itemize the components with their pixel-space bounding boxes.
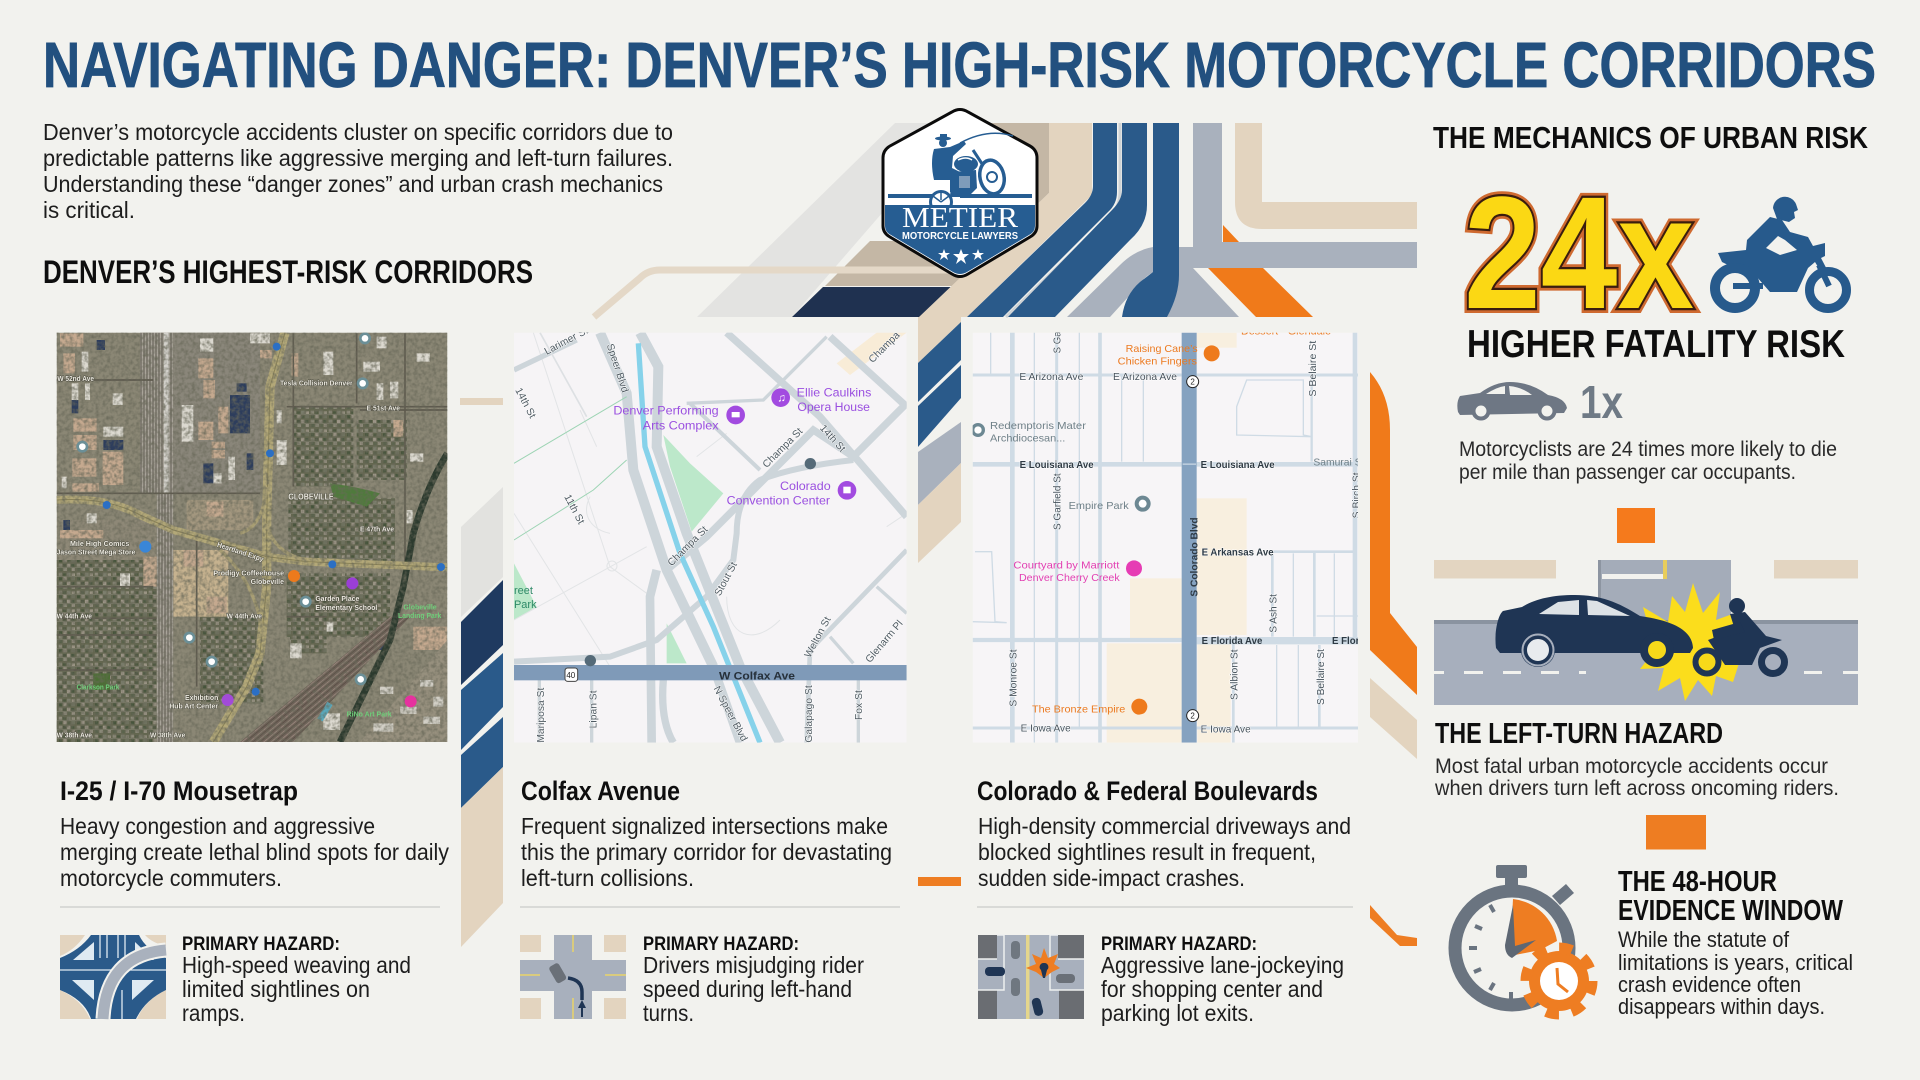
corridor description: High-density commercial driveways and xyxy=(978,813,1351,839)
map: Colorado Boulevard: S Ga xyxy=(1053,331,1064,353)
hazard text xyxy=(182,934,411,1026)
intro text xyxy=(43,119,673,223)
map: Colorado Boulevard: E Arizona Ave xyxy=(1113,372,1177,383)
corridor description: Heavy congestion and aggressive xyxy=(60,813,375,839)
map: Colfax Avenue: Lipan St xyxy=(589,690,600,728)
logo: Metier hexagon badge: METIER xyxy=(902,202,1019,234)
text: left-turn hazard: Most fatal urban motorcycle accidents occur xyxy=(1435,755,1828,778)
map: Colfax Avenue: 14th St xyxy=(512,386,537,420)
map: I-25 / I-70 satellite: Clarkson Park xyxy=(77,682,120,691)
text: evidence window: disappears within days. xyxy=(1618,994,1825,1019)
map: Colorado Boulevard: S Birch St xyxy=(1351,472,1362,518)
map: Colorado Boulevard: Samurai S xyxy=(1313,458,1362,469)
map: Colorado Boulevard: Redemptoris Mater xyxy=(990,421,1087,432)
hazard text xyxy=(1101,934,1344,1026)
text: evidence window xyxy=(1618,927,1853,1019)
corridor name: Colorado & Federal Boulevards xyxy=(977,776,1318,806)
map: Colorado Boulevard: Empire Park xyxy=(1069,501,1130,512)
map: Colfax Avenue: Colorado xyxy=(780,480,831,493)
panel: I-25 / I-70 Mousetrap text xyxy=(60,776,449,1026)
map: Colfax Avenue: 14th St xyxy=(817,423,847,455)
icon: busy intersection xyxy=(978,935,1084,1019)
map: I-25 / I-70 satellite: Jason Street Mega Store xyxy=(57,548,135,557)
map: Colorado Boulevard: Dessert · Glendale xyxy=(1241,327,1331,338)
map: Colorado Boulevard: S Garfield St xyxy=(1053,473,1064,530)
hazard text: Aggressive lane-jockeying xyxy=(1101,952,1344,978)
map: Colfax Avenue: Fox St xyxy=(854,690,865,720)
map: Colfax Avenue: Galapago St xyxy=(804,685,815,743)
map: I-25 / I-70 satellite: Tesla Collision Denver xyxy=(280,379,353,388)
text: left-turn hazard xyxy=(1434,755,1839,800)
icon: left-turn intersection xyxy=(520,935,626,1019)
intro text: Understanding these “danger zones” and urban crash mechanics xyxy=(43,171,663,197)
corridor description: motorcycle commuters. xyxy=(60,865,282,891)
road graphic: left channel xyxy=(460,398,503,947)
map: I-25 / I-70 satellite: Landing Park xyxy=(398,611,442,620)
map: Colfax Avenue: Stout St xyxy=(713,560,740,598)
map: Colfax Avenue: Ellie Caulkins xyxy=(797,387,872,400)
corridor description xyxy=(60,813,449,891)
map: Colfax Avenue: reet xyxy=(514,585,533,597)
map: Colfax Avenue: Champa St xyxy=(666,524,710,569)
map: Colorado Boulevard: E Arizona Ave xyxy=(1019,372,1083,383)
hazard text: PRIMARY HAZARD: xyxy=(182,934,340,955)
icon: car xyxy=(1457,382,1567,418)
logo: Metier hexagon badge xyxy=(883,110,1037,276)
heading: evidence window xyxy=(1618,866,1843,927)
map: Colorado Boulevard: E Louisiana Ave xyxy=(1201,460,1275,471)
map: I-25 / I-70 satellite: Globeville xyxy=(403,602,437,611)
corridor description: blocked sightlines result in frequent, xyxy=(978,839,1316,865)
intro text: is critical. xyxy=(43,197,135,223)
map: Colorado Boulevard: E Iowa Ave xyxy=(1201,724,1251,735)
map: Colorado Boulevard: S Belaire St xyxy=(1308,340,1319,397)
intro text: predictable patterns like aggressive merging and left-turn failures. xyxy=(43,145,673,171)
map: Colorado Boulevard: S Albion St xyxy=(1229,649,1240,700)
road graphic: centre channel xyxy=(918,317,961,886)
map: Colorado Boulevard: 2 xyxy=(1190,712,1195,721)
text: evidence window: limitations is years, critical xyxy=(1618,950,1853,975)
map: Colfax Avenue: Larimer St xyxy=(543,326,590,358)
hazard text: turns. xyxy=(643,1000,694,1026)
corridor description xyxy=(978,813,1351,891)
map: Colfax Avenue: Mariposa St xyxy=(536,687,547,743)
stat description: Motorcyclists are 24 times more likely to die xyxy=(1459,438,1837,461)
map: I-25 / I-70 satellite: Exhibition xyxy=(185,693,219,702)
stat description: per mile than passenger car occupants. xyxy=(1459,461,1796,484)
accent: orange block xyxy=(1646,815,1706,850)
map: I-25 / I-70 satellite: GLOBEVILLE xyxy=(288,492,334,501)
stat description xyxy=(1459,438,1837,484)
corridor description xyxy=(521,813,892,891)
map: Colorado Boulevard: Chicken Fingers xyxy=(1118,357,1197,368)
map: Colfax Avenue: W Colfax Ave xyxy=(719,671,795,683)
corridor description: sudden side-impact crashes. xyxy=(978,865,1245,891)
hazard text: Drivers misjudging rider xyxy=(643,952,864,978)
accent: orange square xyxy=(1617,508,1655,543)
illustration: left-turn crash xyxy=(1434,560,1858,705)
panel: Colfax Avenue text xyxy=(520,776,900,1026)
map: I-25 / I-70 satellite: W 38th Ave xyxy=(150,730,185,739)
logo: Metier hexagon badge: MOTORCYCLE LAWYERS xyxy=(902,230,1018,242)
heading: evidence window: THE 48-HOUR xyxy=(1618,866,1777,898)
map: Colorado Boulevard: Denver Cherry Creek xyxy=(1019,573,1121,584)
corridor description: merging create lethal blind spots for daily xyxy=(60,839,449,865)
icon: motorcycle rider xyxy=(1715,197,1846,308)
map: I-25 / I-70 satellite: W 44th Ave xyxy=(227,612,262,621)
map: Colfax Avenue: Champa xyxy=(867,330,903,365)
map: Colorado Boulevard: S Ash St xyxy=(1269,594,1280,633)
map: Colfax Avenue: N Speer Blvd xyxy=(711,685,749,744)
map: Colfax Avenue: Glenarm Pl xyxy=(864,619,905,665)
text: left-turn hazard: when drivers turn left across oncoming riders. xyxy=(1434,777,1839,800)
hazard text: limited sightlines on xyxy=(182,976,370,1002)
icon: freeway interchange xyxy=(60,935,166,1019)
corridor description: this the primary corridor for devastating xyxy=(521,839,892,865)
stat: 24x: 24x xyxy=(1464,163,1694,342)
hazard text: for shopping center and xyxy=(1101,976,1323,1002)
corridor name: Colfax Avenue xyxy=(521,776,680,806)
map: Colfax Avenue: ♫ xyxy=(777,393,786,405)
map: Colfax Avenue: Welton St xyxy=(803,615,834,660)
map: I-25 / I-70 satellite: Globeville xyxy=(251,577,284,586)
map: I-25 / I-70 satellite: Prodigy Coffeehouse xyxy=(213,569,284,578)
map: I-25 / I-70 satellite: E 47th Ave xyxy=(360,525,394,534)
text: evidence window: While the statute of xyxy=(1618,927,1790,952)
hazard text: PRIMARY HAZARD: xyxy=(643,934,799,955)
panel: Colorado & Federal text xyxy=(977,776,1353,1026)
map: Colfax Avenue: Convention Center xyxy=(727,495,830,508)
map: Colfax Avenue xyxy=(512,326,907,744)
map: Colorado Boulevard: E Florida Ave xyxy=(1202,636,1263,647)
hazard text: ramps. xyxy=(182,1000,245,1026)
map: I-25 / I-70 satellite: W 38th Ave xyxy=(57,730,92,739)
map: Colorado Boulevard xyxy=(973,327,1362,743)
map: Colfax Avenue: Opera House xyxy=(797,401,870,414)
map: I-25 / I-70 satellite: Elementary School xyxy=(315,603,377,612)
map: Colorado Boulevard: Courtyard by Marriott xyxy=(1013,560,1119,571)
stat: 24x: 24x xyxy=(1464,163,1694,342)
map: Colorado Boulevard: 2 xyxy=(1190,378,1195,387)
corridor description: left-turn collisions. xyxy=(521,865,694,891)
map: Colorado Boulevard: E Arkansas Ave xyxy=(1202,547,1274,558)
map: Colfax Avenue: Park xyxy=(514,599,537,611)
corridor name: I-25 / I-70 Mousetrap xyxy=(60,776,298,806)
heading: evidence window: EVIDENCE WINDOW xyxy=(1618,895,1843,927)
map: Colfax Avenue: 11th St xyxy=(561,493,586,526)
hazard text: parking lot exits. xyxy=(1101,1000,1254,1026)
map: I-25 / I-70 satellite: Hub Art Center xyxy=(169,702,218,711)
map: Colorado Boulevard: S Colorado Blvd xyxy=(1189,517,1200,597)
intro text: Denver’s motorcycle accidents cluster on specific corridors due to xyxy=(43,119,673,145)
map: Colfax Avenue: 40 xyxy=(566,671,576,680)
map: Colorado Boulevard: E Flori xyxy=(1332,636,1362,647)
map: Colorado Boulevard: Archdiocesan... xyxy=(990,434,1065,445)
map: Colorado Boulevard: E Louisiana Ave xyxy=(1020,460,1094,471)
map: I-25 / I-70 satellite: E 51st Ave xyxy=(367,404,400,413)
comparison: 1x: 1x xyxy=(1580,376,1623,428)
text: evidence window: crash evidence often xyxy=(1618,972,1801,997)
hazard text: High-speed weaving and xyxy=(182,952,411,978)
map: I-25 / I-70 satellite: W 52nd Ave xyxy=(57,374,94,383)
map: Colorado Boulevard: E Iowa Ave xyxy=(1021,724,1071,735)
map: Colfax Avenue: Arts Complex xyxy=(643,419,719,432)
map: Colorado Boulevard: S Bellaire St xyxy=(1316,649,1327,705)
hazard text xyxy=(643,934,864,1026)
hazard text: speed during left-hand xyxy=(643,976,852,1002)
stat label: higher fatality risk: HIGHER FATALITY RISK xyxy=(1467,323,1845,366)
map: I-25 / I-70 satellite xyxy=(57,333,447,742)
map: Colorado Boulevard: The Bronze Empire xyxy=(1032,705,1126,716)
map: I-25 / I-70 satellite: Garden Place xyxy=(315,594,359,603)
heading: corridors: DENVER’S HIGHEST-RISK CORRIDORS xyxy=(43,254,533,290)
road graphic: right channel xyxy=(1370,372,1417,946)
map: Colorado Boulevard: Raising Cane’s xyxy=(1126,344,1198,355)
heading: left-turn hazard: THE LEFT-TURN HAZARD xyxy=(1435,718,1723,750)
corridor description: Frequent signalized intersections make xyxy=(521,813,888,839)
hazard text: PRIMARY HAZARD: xyxy=(1101,934,1257,955)
map: Colorado Boulevard: S Monroe St xyxy=(1009,649,1020,707)
map: Colfax Avenue: Champa St xyxy=(761,426,805,470)
road graphic: central interchange xyxy=(594,123,1417,317)
icon: stopwatch and gear xyxy=(1455,865,1592,1014)
map: I-25 / I-70 satellite: Mile High Comics xyxy=(70,539,129,548)
map: Colfax Avenue: Speer Blvd xyxy=(604,343,630,394)
map: Colfax Avenue: Denver Performing xyxy=(613,405,719,418)
map: I-25 / I-70 satellite: W 44th Ave xyxy=(57,611,92,620)
map: I-25 / I-70 satellite: RiNo Art Park xyxy=(347,710,393,719)
map: I-25 / I-70 satellite: Heartland Expy xyxy=(216,540,266,564)
